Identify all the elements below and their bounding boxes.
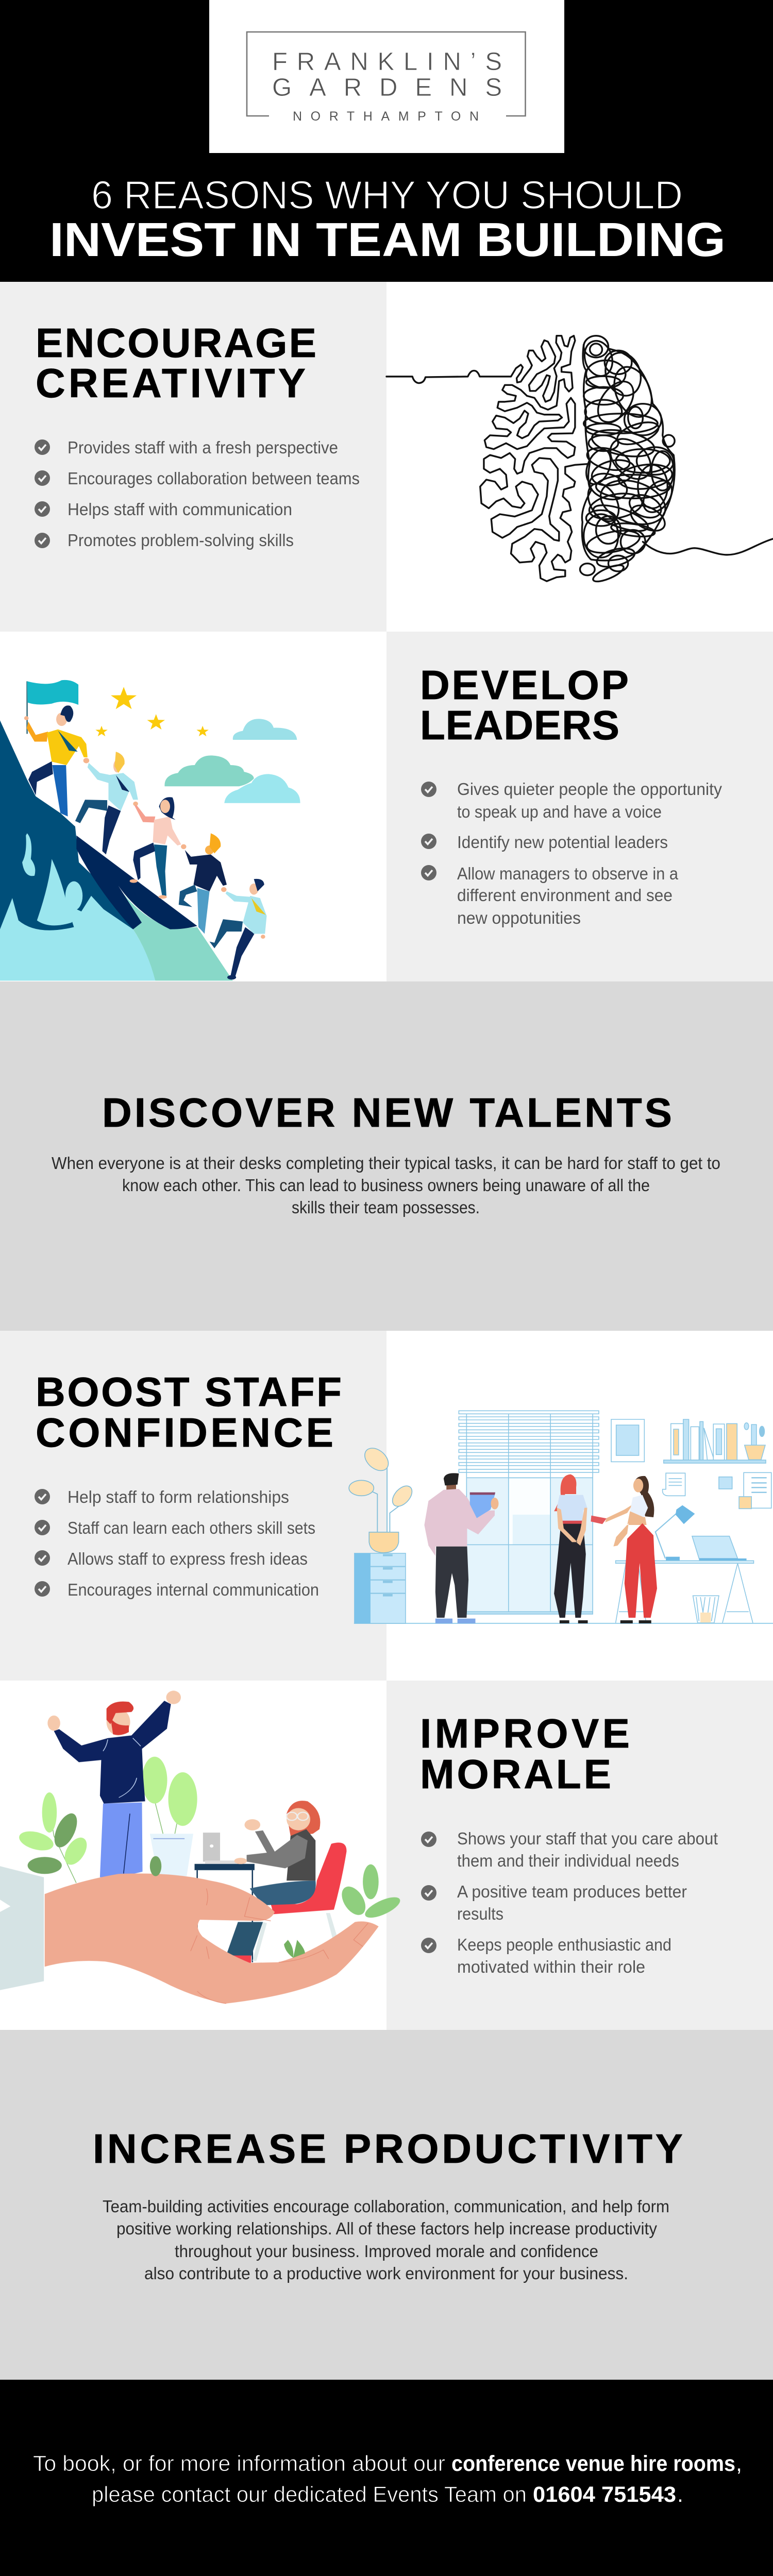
illustration: team climbing a mountain xyxy=(0,680,300,981)
heading: boost staff confidence xyxy=(36,1369,342,1455)
footer text: . xyxy=(677,2482,683,2507)
logo: Franklin's Gardens Northampton: NORTHAMPTON xyxy=(293,109,479,124)
heading: improve morale xyxy=(420,1710,630,1797)
bullet list: creativity xyxy=(35,438,360,550)
bullet list: morale xyxy=(421,1829,718,1976)
bullet list: creativity: Helps staff with communication xyxy=(68,500,292,519)
panel: improve morale xyxy=(0,1681,773,2030)
potted plant xyxy=(142,1757,197,1876)
paragraph: increase productivity: Team-building activities encourage collaboration, communication, and help form xyxy=(103,2197,669,2216)
heading: encourage creativity: ENCOURAGE xyxy=(36,320,316,366)
paragraph: discover new talents xyxy=(52,1154,720,1217)
heading: develop leaders xyxy=(420,662,629,748)
paragraph: discover new talents: know each other. This can lead to business owners being unaware of all the xyxy=(122,1176,650,1195)
illustration: office conversation xyxy=(349,1411,773,1623)
bullet list: leaders xyxy=(421,779,722,927)
logo: Franklin's Gardens Northampton: GARDENS xyxy=(272,74,502,101)
panel: develop leaders xyxy=(0,632,773,981)
sprouts and right plant xyxy=(150,1856,404,1958)
footer text: To book, or for more information about our xyxy=(33,2451,445,2476)
heading: discover new talents: DISCOVER NEW TALENTS xyxy=(102,1090,672,1136)
illustration: people on a giant hand xyxy=(0,1691,404,2004)
red chair xyxy=(253,1842,346,1961)
heading: increase productivity: INCREASE PRODUCTIVITY xyxy=(93,2126,683,2172)
left plant xyxy=(16,1792,91,1883)
waste bin xyxy=(693,1596,719,1623)
shirt cuff xyxy=(0,1866,44,1990)
panel: boost staff confidence xyxy=(0,1331,773,1681)
bullet list: creativity: Encourages collaboration between teams xyxy=(68,469,360,488)
bullet list: leaders: Identify new potential leaders xyxy=(457,833,668,852)
bullet list: confidence: Encourages internal communication xyxy=(68,1580,319,1599)
man with tablet xyxy=(424,1473,498,1623)
logo: Franklin's Gardens Northampton: FRANKLIN’S xyxy=(272,48,502,76)
blinds xyxy=(459,1411,599,1478)
filing cabinet xyxy=(355,1553,406,1623)
woman in red trousers xyxy=(591,1476,657,1623)
bullet list: confidence xyxy=(35,1487,319,1599)
bullet list: morale: results xyxy=(457,1904,503,1923)
bullet list: morale: Keeps people enthusiastic and xyxy=(457,1935,671,1954)
heading: encourage creativity: CREATIVITY xyxy=(36,360,306,406)
logo: Franklin's Gardens Northampton xyxy=(209,0,564,153)
climber 2 xyxy=(75,752,138,855)
paragraph: increase productivity xyxy=(103,2197,669,2283)
bookshelf xyxy=(664,1419,766,1463)
footer text: conference venue hire rooms xyxy=(451,2451,735,2476)
flag xyxy=(27,680,78,734)
giant hand xyxy=(45,1873,379,2004)
paragraph: discover new talents: When everyone is at their desks completing their typical tasks, it can be hard for staff to get to xyxy=(52,1154,720,1173)
bullet list: leaders: new oppotunities xyxy=(457,908,581,927)
panel: footer call to action xyxy=(0,2380,773,2576)
title: 6 REASONS WHY YOU SHOULD xyxy=(91,173,683,217)
bullet list: confidence: Staff can learn each others skill sets xyxy=(68,1518,315,1537)
bullet list: confidence: Allows staff to express fresh ideas xyxy=(68,1549,308,1568)
bullet list: morale: motivated within their role xyxy=(457,1957,645,1976)
panel: encourage creativity xyxy=(0,282,773,632)
floor line xyxy=(354,1623,773,1624)
panel: discover new talents xyxy=(0,981,773,1331)
bullet list: creativity: Promotes problem-solving skills xyxy=(68,531,294,550)
clouds xyxy=(164,719,300,803)
heading: develop leaders: LEADERS xyxy=(420,702,619,748)
climber 3 xyxy=(130,797,187,899)
desk with lamp and laptop xyxy=(616,1505,753,1623)
bullet list: leaders: to speak up and have a voice xyxy=(457,802,662,821)
wall picture xyxy=(611,1419,644,1462)
bullet list: confidence: Help staff to form relationships xyxy=(68,1487,289,1506)
woman with red hair xyxy=(554,1475,588,1623)
bullet list: morale: A positive team produces better xyxy=(457,1882,687,1901)
climber 5 xyxy=(210,879,267,979)
wall notes xyxy=(663,1472,771,1509)
footer text: , xyxy=(736,2451,742,2476)
heading: boost staff confidence: CONFIDENCE xyxy=(36,1410,333,1455)
bullet list: morale: Shows your staff that you care about xyxy=(457,1829,718,1848)
heading: develop leaders: DEVELOP xyxy=(420,662,629,708)
illustration: line-art brain xyxy=(386,336,773,584)
paragraph: discover new talents: skills their team possesses. xyxy=(292,1198,480,1217)
title: INVEST IN TEAM BUILDING xyxy=(49,213,726,266)
heading: encourage creativity xyxy=(36,320,316,406)
paragraph: increase productivity: positive working relationships. All of these factors help increase productivity xyxy=(116,2219,657,2238)
mountain xyxy=(0,720,233,981)
man cheering xyxy=(47,1691,181,1877)
panel: increase productivity xyxy=(0,2030,773,2380)
paragraph: increase productivity: also contribute to a productive work environment for your business. xyxy=(144,2264,628,2283)
climber 1: leader xyxy=(24,705,89,817)
heading: boost staff confidence: BOOST STAFF xyxy=(36,1369,342,1415)
stars xyxy=(95,687,209,736)
desk with laptop xyxy=(195,1833,255,1962)
title xyxy=(49,173,726,266)
bullet list: morale: them and their individual needs xyxy=(457,1851,679,1870)
bullet list: leaders: different environment and see xyxy=(457,886,673,905)
panel: header xyxy=(0,0,773,282)
paragraph: increase productivity: throughout your business. Improved morale and confidence xyxy=(175,2242,598,2261)
bullet list: leaders: Allow managers to observe in a xyxy=(457,864,679,883)
heading: improve morale: MORALE xyxy=(420,1751,611,1797)
bullet list: creativity: Provides staff with a fresh perspective xyxy=(68,438,338,457)
footer text: please contact our dedicated Events Team on xyxy=(92,2482,527,2507)
footer text xyxy=(33,2451,742,2507)
seated woman xyxy=(226,1801,320,1963)
potted plant xyxy=(349,1446,416,1553)
footer text: 01604 751543 xyxy=(533,2482,676,2507)
heading: improve morale: IMPROVE xyxy=(420,1710,630,1756)
climber 4 xyxy=(179,833,227,934)
window xyxy=(466,1478,593,1614)
bullet list: leaders: Gives quieter people the opportunity xyxy=(457,779,722,799)
